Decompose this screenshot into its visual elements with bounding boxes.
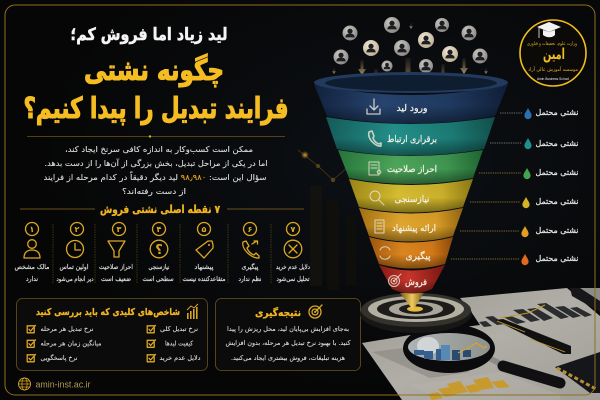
icon: chart [187,304,198,319]
magnifier lens [403,324,495,373]
heading: key metrics: شاخص‌های کلیدی که باید بررسی کنید [36,307,180,318]
conclusion text: کنید. با بهبود نرخ تبدیل هر مرحله، بدون افزایش [226,339,351,347]
leak row 2: نشتی محتمل [536,139,578,148]
target board [360,293,472,333]
magnifier handle [487,357,499,363]
point 4: needs assessment: ۴ [157,225,162,234]
point 3: qualification: ۳ [117,225,122,234]
stage: contact: برقراری ارتباط [387,135,437,145]
point 3: qualification: ضعیف است [101,275,131,283]
leak row 6 [451,254,578,265]
point 2: first contact: دیر انجام می‌شود [56,275,94,283]
leak row 1: نشتی محتمل [536,108,578,117]
panel: conclusion [216,298,360,370]
lower gold bars [428,377,510,400]
point 6: follow up: ۶ [248,225,253,234]
point 3: qualification: احراز صلاحیت [99,263,133,271]
intro paragraph: سؤال این است: ۹۸٫۹۸۰ لید دیگر دقیقاً در کدام مرحله از فرایند [44,171,267,182]
point 5: offer: ۵ [202,225,207,234]
metric checklist: نرخ پاسخگویی [40,354,78,362]
intro paragraph: اما در یکی از مراحل تبدیل، بخش بزرگی از آن‌ها را از دست بدهد. [44,158,268,168]
intro paragraph [44,145,268,196]
leak row 6: نشتی محتمل [536,254,578,263]
stage: qualification [338,150,483,184]
point 1: owner: ۱ [30,225,34,234]
stage: needs assessment [349,179,473,212]
point 6: follow up [238,222,262,283]
title line 3: فرایند تبدیل را پیدا کنیم؟ [24,91,288,126]
metric checklist: میانگین زمان هر مرحله [40,340,102,348]
stage: qualification: احراز صلاحیت [387,165,437,175]
lead icons falling into funnel [334,17,488,73]
metric checklist: کیفیت لیدها [165,340,194,348]
heading: conclusion: نتیجه‌گیری [255,306,301,319]
website footer [18,378,90,390]
stage: offer: ارائه پیشنهاد [392,224,436,234]
leak row 1 [500,108,578,119]
metric checklist [27,325,201,362]
point 7: lost reasons [276,222,310,283]
title line 2: چگونه نشتی [84,53,224,88]
point 2: first contact: اولین تماس [60,263,89,271]
metric checklist: نرخ تبدیل کلی [160,325,198,333]
intro paragraph: از دست رفته‌اند؟ [122,187,186,196]
point 7: lost reasons: تحلیل نمی‌شود [276,275,310,283]
point 3: qualification [99,222,133,283]
stage: contact [326,117,495,156]
conclusion text [226,325,351,362]
point 5: offer [182,222,226,283]
pen [495,319,571,354]
panel: key metrics [16,298,208,370]
intro paragraph: ممکن است کسب‌وکار به اندازه کافی سرنخ ایجاد کند، [65,145,253,154]
falling arrows [332,23,488,86]
stage: needs assessment: نیازسنجی [394,195,430,205]
point 4: needs assessment: ؟ [155,243,163,258]
funnel tip [400,293,424,310]
point 7: lost reasons: ۷ [291,225,296,234]
notebook top right [570,288,600,312]
logo badge [520,20,586,86]
website footer: amin-inst.ac.ir [36,380,90,390]
title line 1: لید زیاد اما فروش کم؛ [70,25,228,45]
leak row 3 [479,168,578,179]
stage: lead entry [314,72,508,124]
logo badge: موسسه آموزش عالی آزاد [528,66,578,73]
stage: offer [359,208,463,242]
conclusion text: هزینه تبلیغات، فروش بیشتری ایجاد می‌کنید. [231,354,345,362]
leak row 3: نشتی محتمل [536,168,578,177]
point 7: lost reasons: دلایل عدم خرید [276,263,310,271]
funnel [314,72,508,310]
leak row 2 [490,138,578,149]
icon: target [309,305,322,318]
leak labels [451,108,578,265]
stage: sale [379,265,445,294]
point 6: follow up: پیگیری [242,263,259,271]
section heading: 7 points: ۷ نقطه اصلی نشتی فروش [100,203,220,216]
point 1: owner: ندارد [26,275,38,283]
metric checklist: دلایل عدم خرید [160,354,201,362]
point 5: offer: متقاعدکننده نیست [182,275,226,283]
metric checklist: نرخ تبدیل هر مرحله [40,325,94,333]
report paper [362,288,600,400]
point 2: first contact: ۲ [75,225,80,234]
leak row 4 [470,197,578,208]
paper shadow panel [372,346,470,378]
point 5: offer: پیشنهاد [194,263,214,271]
title block [24,25,288,126]
point 4: needs assessment [142,222,174,283]
leak row 4: نشتی محتمل [536,197,578,206]
conclusion text: به‌جای افزایش بی‌پایان لید، محل ریزش را پیدا [227,325,349,333]
point 4: needs assessment: سطحی است [142,275,174,283]
leak row 5: نشتی محتمل [536,226,578,235]
background chart: faint bars and trend line [298,150,356,290]
leak row 5 [460,226,578,237]
logo badge: امین [543,45,565,63]
stage: lead entry: ورود لید [396,104,428,114]
point 4: needs assessment: نیازسنجی [148,263,170,271]
point 6: follow up: نظم ندارد [238,275,262,283]
stage: follow up [369,237,453,268]
logo badge: وزارت علوم، تحقیقات و فناوری [527,41,577,47]
notebook with spiral [555,352,600,393]
point 2: first contact [56,222,94,283]
desk scene: papers, pen, magnifier [362,288,600,400]
logo badge: Amin Business School [537,77,569,81]
stage: sale: فروش [405,278,427,288]
point 1: owner [14,222,50,283]
paper bar chart [479,303,592,327]
stage: follow up: پیگیری [406,250,431,262]
point 1: owner: مالک مشخص [14,263,50,271]
